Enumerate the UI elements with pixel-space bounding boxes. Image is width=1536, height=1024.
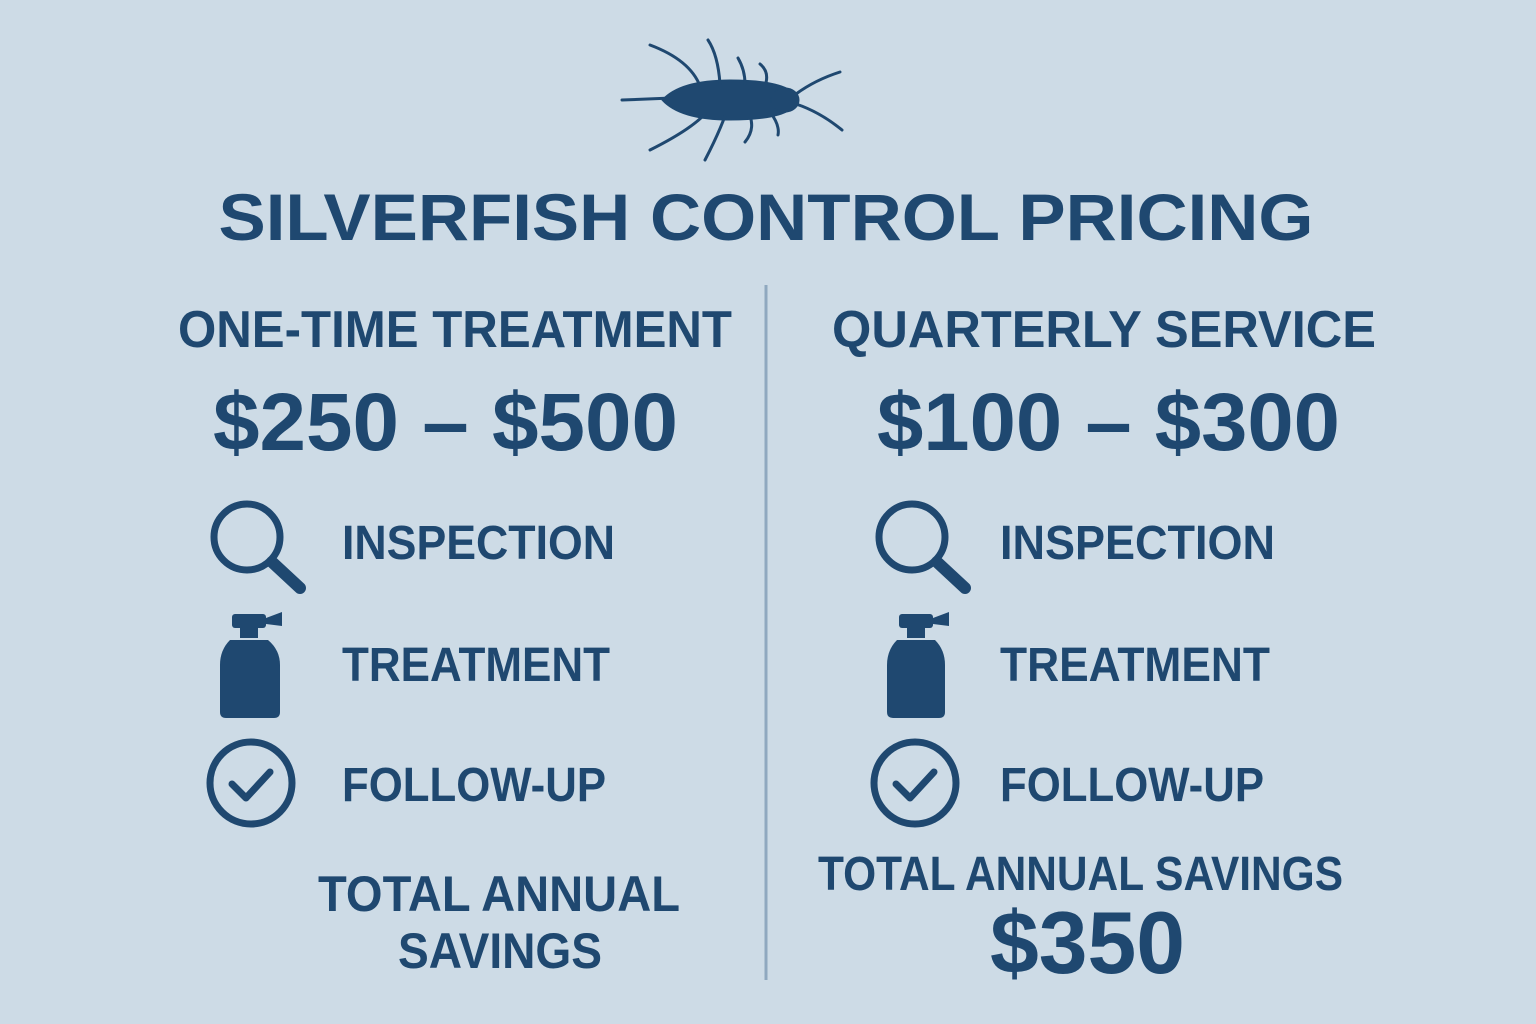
icon: check right <box>874 742 956 824</box>
text: inspection right: INSPECTION <box>1000 517 1275 570</box>
icon: spray right <box>887 612 949 718</box>
heading left: ONE-TIME TREATMENT <box>178 301 732 359</box>
text: savings amount: $350 <box>990 893 1185 992</box>
divider <box>764 285 768 980</box>
text: treatment left: TREATMENT <box>342 639 610 692</box>
icon: magnifier left <box>214 504 300 588</box>
price left: $250 – $500 <box>213 377 678 468</box>
text: total annual savings right: TOTAL ANNUAL SAVINGS <box>818 848 1343 901</box>
title: SILVERFISH CONTROL PRICING <box>218 180 1314 254</box>
heading right: QUARTERLY SERVICE <box>832 301 1376 359</box>
panel: quarterly service <box>818 301 1376 992</box>
text: inspection left: INSPECTION <box>342 517 615 570</box>
panel: one-time treatment: SAVINGS <box>398 923 602 979</box>
panel: one-time treatment <box>178 301 732 979</box>
icon: check left <box>210 742 292 824</box>
price right: $100 – $300 <box>877 377 1340 468</box>
text: total annual savings left: TOTAL ANNUAL <box>318 866 680 922</box>
text: follow-up left: FOLLOW-UP <box>342 759 606 812</box>
text: treatment right: TREATMENT <box>1000 639 1270 692</box>
text: follow-up right: FOLLOW-UP <box>1000 759 1264 812</box>
icon: magnifier right <box>879 504 965 588</box>
icon: spray left <box>220 612 282 718</box>
icon: silverfish <box>622 40 842 160</box>
